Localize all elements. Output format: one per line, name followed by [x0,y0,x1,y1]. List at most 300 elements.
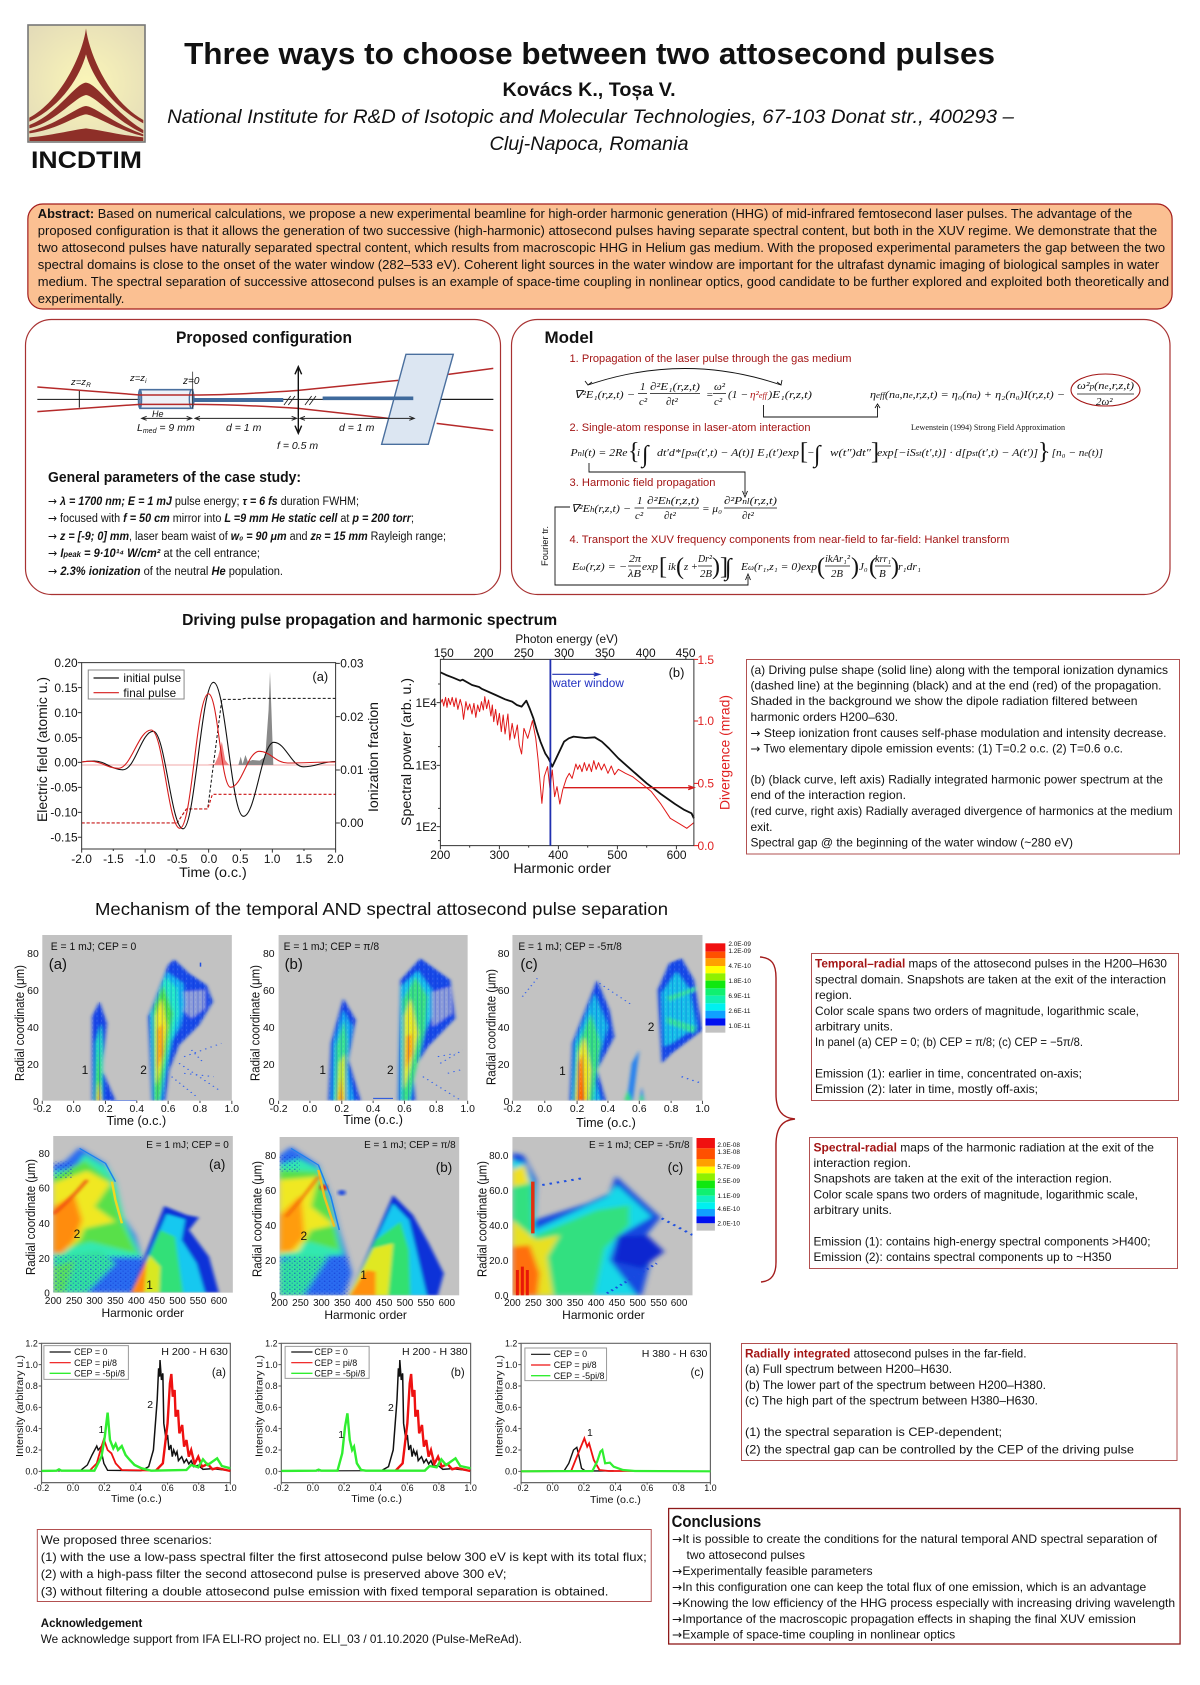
line chart c: high-energy part: 0.0 [546,1483,559,1493]
equation 3: harmonic propagation [571,495,777,522]
beamline diagram: z=0 [182,376,200,387]
heatmaps: temporal-radial maps: 1 [82,1063,89,1077]
heatmaps: spectral-radial maps: 0.0 [495,1291,509,1302]
equation 2: dipole moment: dt′d*[p st(t′,t) − A(t)] E₁(t′)exp [657,447,800,459]
heatmaps: spectral-radial maps: 600 [438,1298,456,1309]
equation 4: Hankel transform: 2B [700,568,712,580]
label: Fourier transform: Fourier tr. [540,526,551,566]
equation: effective refractive index: ηeff(na,ne,r,z,t) = η₀(n a) + η₂(n₀)I(r,z,t) − [870,389,1065,401]
heatmaps: spectral-radial maps: 400 [355,1298,372,1309]
chart b: harmonic spectrum and divergence: 450 [676,646,696,660]
text box: radially integrated pulses: (c) The high part of the spectrum between H380–H630. [745,1394,1038,1408]
equation: effective refractive index [870,374,1140,408]
panel: abstract: Abstract: Based on numerical calculations, we propose a new experimental beamline for high-order harmonic generation (HHG) of mid-infrared femtosecond laser pulses. The advantage of the [38,207,1132,221]
heatmaps: temporal-radial maps: 1.0 [695,1104,710,1115]
colour scale: spectral maps [696,1138,740,1231]
line chart c: high-energy part: 0.6 [641,1483,653,1493]
colour scale: temporal maps: 1.8E-10 [728,978,751,985]
chart a: driving pulse field and ionization: 0.02 [340,710,364,724]
equation 2: dipole moment: ] [871,439,879,465]
heatmaps: spectral-radial maps: 600 [671,1298,688,1309]
line chart c: high-energy part: 0.4 [609,1483,622,1493]
heatmaps: temporal-radial maps: 0.6 [397,1104,412,1115]
heatmaps: temporal-radial maps: 20 [263,1060,275,1071]
chart b: harmonic spectrum and divergence: 1.5 [697,653,714,667]
equation 1: laser propagation: = [706,389,713,401]
heatmaps: temporal-radial maps: 0 [504,1097,510,1108]
heatmaps: temporal-radial maps: E = 1 mJ; CEP = -5π/8 [518,941,622,953]
chart b: harmonic spectrum and divergence: 1E3 [416,758,437,773]
heatmaps: temporal-radial maps: 0.0 [303,1104,317,1115]
text box: spectral-radial maps: interaction region. [814,1157,911,1170]
heatmaps: temporal-radial maps: -0.2 [270,1104,288,1115]
heatmaps: temporal-radial maps: 0.4 [601,1104,615,1115]
line chart a: full spectrum: 0.0 [25,1466,38,1477]
heatmaps: spectral-radial maps: 400 [128,1296,145,1307]
heatmaps: temporal-radial maps: 0.4 [130,1104,144,1115]
line chart c: high-energy part: 0.4 [505,1424,517,1434]
heatmaps: spectral-radial maps: 300 [86,1296,103,1307]
line chart c: high-energy part: CEP = 0 [554,1349,587,1359]
colour scale: temporal maps: 2.0E-09 [728,941,751,948]
heatmaps: spectral-radial maps: (c) [668,1160,683,1175]
beamline diagram: L [137,422,143,434]
beamline diagram: d = 1 m [339,422,375,434]
line chart a: full spectrum: (a) [212,1367,226,1379]
heatmaps: spectral-radial maps: 350 [567,1298,584,1309]
equation 4: Hankel transform: ( [817,554,825,580]
text box: driving pulse description: exit. [750,821,772,834]
heatmaps: spectral-radial maps: 80.0 [489,1151,509,1162]
heatmaps: spectral-radial maps: 1 [146,1278,153,1292]
heatmaps: spectral-radial maps: 550 [650,1298,667,1309]
text box: three scenarios: (2) with a high-pass filter the second attosecond pulse is preserved above 300 eV; [41,1569,506,1581]
heatmaps: spectral-radial maps: 600 [211,1296,228,1307]
text box: driving pulse description: (dashed line) at the beginning (black) and at the end (red) of the propagation. [750,680,1162,692]
equation 1: laser propagation: c² [639,396,648,408]
panel: model [512,320,1170,594]
heatmaps: spectral-radial maps: 300 [546,1298,563,1309]
chart a: driving pulse field and ionization: Ionization fraction [365,702,381,812]
heatmaps: spectral-radial maps: 2 [300,1229,307,1243]
colour scale: temporal maps: 6.9E-11 [728,993,751,1000]
line chart b: low-energy part: CEP = pi/8 [314,1358,357,1368]
heading: proposed configuration: Proposed configuration [176,328,352,347]
line chart b: low-energy part: H 200 - H 380 [402,1347,468,1358]
heading: general parameters: General parameters of the case study: [48,470,301,486]
line chart b: low-energy part: 2 [388,1403,394,1414]
colour scale: temporal maps [705,941,751,1033]
equation 1: laser propagation: )E₁(r,z,t) [767,389,812,401]
line chart b: low-energy part: 0.0 [307,1483,319,1493]
list: case-study parameters [48,494,446,578]
line chart b: low-energy part: 0.6 [265,1402,278,1413]
equation 2: dipole moment: } [1038,439,1050,465]
heatmaps: temporal-radial maps: -0.2 [503,1104,522,1115]
text box: spectral-radial maps: Emission (2): contains spectral components up to ~H350 [814,1251,1112,1264]
chart a: driving pulse field and ionization: 1.0 [264,852,281,866]
equation 4: Hankel transform: [ [659,554,667,580]
chart b: harmonic spectrum and divergence [398,632,732,876]
heatmaps: temporal-radial maps: 1.0 [225,1104,239,1115]
equation 2: dipole moment: { [628,439,640,465]
text box: spectral-radial maps: Emission (1): contains high-energy spectral components >H400; [814,1236,1150,1248]
line chart c: high-energy part: 1 [587,1428,593,1439]
equation 3: harmonic propagation: ∇²Eh(r,z,t) − [571,503,631,515]
line chart c: high-energy part: 0.0 [505,1466,517,1477]
step headings: 3. Harmonic field propagation [570,477,716,489]
text box: radially integrated pulses: (b) The lower part of the spectrum between H200–H380. [745,1379,1046,1392]
heatmaps: temporal-radial maps: (c) [520,956,538,973]
chart a: driving pulse field and ionization: 0.00 [54,755,78,770]
chart a: driving pulse field and ionization: 0.20 [54,656,78,670]
heatmaps: spectral-radial maps: 300 [313,1298,330,1309]
heatmaps: spectral-radial maps: 40 [265,1221,277,1232]
acknowledgement: We acknowledge support from IFA ELI-RO project no. ELI_03 / 01.10.2020 (Pulse-MeReAd). [41,1634,522,1646]
equation 4: Hankel transform [571,553,921,582]
chart a: driving pulse field and ionization: 0.0 [201,852,218,866]
colour scale: temporal maps: 2.6E-11 [728,1008,751,1015]
equation 2: dipole moment: i [637,447,640,459]
text box: three scenarios: We proposed three scenarios: [41,1535,212,1547]
panel: abstract [28,204,1172,309]
equation 4: Hankel transform: r₁dr₁ [898,561,921,573]
heatmaps: temporal-radial maps: 0.6 [161,1104,176,1115]
heatmaps: temporal-radial maps: 60 [498,986,510,997]
equation 4: Hankel transform: ( [869,554,877,580]
equation 2: dipole moment: exp[−iS st(t′,t)] · d[p st(t′,t) − A(t′)] [877,447,1038,459]
beamline diagram [37,354,493,452]
line chart b: low-energy part: 0.8 [433,1483,445,1493]
line chart a: full spectrum: 2 [147,1400,153,1411]
equation 3: harmonic propagation: 1 [637,495,642,507]
equation 1: laser propagation: c² [714,396,723,408]
heatmaps: temporal-radial maps: -0.2 [33,1104,51,1115]
line chart b: low-energy part: 0.0 [265,1466,278,1477]
line chart a: full spectrum: 1.0 [25,1360,38,1370]
panel: abstract: proposed configuration is that it allows the generation of two successive (high-harmonic) attosecond pulses having separate spectral content, but both in the XUV regime. We demonstrate that the [38,224,1157,238]
heatmaps: temporal-radial maps: (b) [285,956,303,973]
heatmaps: spectral-radial maps: 60 [265,1186,277,1197]
citation: Lewenstein: Lewenstein (1994) Strong Field Approximation [911,422,1066,432]
equation 1: laser propagation: ∂t² [666,396,678,408]
heatmaps: spectral-radial maps: 500 [169,1296,186,1307]
panel: conclusions: →Experimentally feasible parameters [672,1564,873,1578]
heatmaps: spectral-radial maps: 200 [271,1298,288,1309]
line chart b: low-energy part: 0.8 [265,1381,278,1391]
chart b: harmonic spectrum and divergence: (b) [669,665,684,680]
heatmaps: spectral-radial maps: 80 [265,1151,277,1162]
chart a: driving pulse field and ionization: -0.05 [50,780,78,795]
heatmaps: temporal-radial maps: 40 [263,1023,275,1034]
line chart a: full spectrum: 0.4 [25,1424,38,1434]
chart b: harmonic spectrum and divergence: 200 [474,646,494,660]
chart b: harmonic spectrum and divergence: 200 [430,848,451,862]
line chart b: low-energy part: 0.4 [370,1483,382,1493]
line chart c: high-energy part: 0.8 [672,1483,685,1493]
equation: effective refractive index: ω²p(ne,r,z,t) [1077,380,1134,392]
authors: Kovács K., Toșa V. [502,80,676,101]
chart a: driving pulse field and ionization: -2.0 [71,852,92,866]
panel: conclusions: →Knowing the low efficiency of the HHG process especially with increasing driving wavelength [672,1596,1175,1610]
equation 3: harmonic propagation: ∂t² [742,510,754,522]
line chart b: low-energy part: 0.2 [338,1483,350,1493]
line chart b: low-energy part: CEP = -5pi/8 [314,1368,365,1379]
heatmaps: spectral-radial maps: 60 [39,1183,50,1195]
equation 4: Hankel transform: ikAr₁² [825,553,851,565]
text box: driving pulse description: end of the interaction region. [750,789,906,802]
equation 1: laser propagation: η²eff [750,389,769,401]
heatmaps: temporal-radial maps: 20 [27,1060,39,1071]
equation 4: Hankel transform: ∫ [723,555,733,582]
equation 3: harmonic propagation: = μ₀ [702,503,722,515]
colour scale: spectral maps: 2.0E-08 [717,1142,740,1149]
text box: temporal-radial maps: Emission (2): later in time, mostly off-axis; [815,1083,1038,1096]
line chart b: low-energy part: CEP = 0 [314,1347,348,1357]
equation 4: Hankel transform: Eω(r,z) = − [571,561,627,573]
step headings: 2. Single-atom response in laser-atom interaction [570,422,810,434]
line chart b: low-energy part: 1.2 [265,1338,278,1349]
panel: conclusions: →Importance of the macroscopic propagation effects in shaping the final XUV emission [672,1612,1136,1626]
arrow: dipole to harmonic source [589,463,748,497]
text box: radially integrated pulses: (1) the spectral separation is CEP-dependent; [745,1426,1002,1439]
line chart b: low-energy part [255,1338,477,1505]
map c [512,935,702,1101]
heatmaps: spectral-radial maps: 0 [44,1288,50,1300]
panel: abstract: two attosecond pulses have naturally separated spectral content, which results from macroscopic HHG in Helium gas medium. With the proposed experimental parameters the gap between the two [38,241,1165,255]
heatmaps: spectral-radial maps: Harmonic order [101,1308,184,1320]
chart a: driving pulse field and ionization: -0.10 [50,805,78,820]
line chart b: low-energy part: (b) [451,1367,465,1379]
panel: conclusions: →In this configuration one can keep the total flux of one emission, which is an advantage [672,1580,1146,1594]
heatmaps: temporal-radial maps: 20 [498,1060,510,1071]
line chart c: high-energy part: 0.2 [505,1445,517,1455]
equation 4: Hankel transform: ik [668,561,677,573]
beamline diagram: f = 0.5 m [277,440,318,452]
chart b: harmonic spectrum and divergence: 350 [595,646,615,660]
line chart c: high-energy part: 0.6 [505,1402,517,1413]
heatmaps: temporal-radial maps: 0.0 [537,1104,552,1115]
chart b: harmonic spectrum and divergence: Divergence (mrad) [716,695,732,810]
map b [279,935,468,1101]
equation 4: Hankel transform: ) [851,554,859,580]
heatmaps: temporal-radial maps: Time (o.c.) [576,1116,636,1130]
equation 4: Hankel transform: J₀ [859,561,868,573]
list: case-study parameters: → λ = 1700 nm; E = 1 mJ pulse energy; τ = 6 fs duration FWHM; [48,494,359,508]
beamline diagram: d = 1 m [226,422,262,434]
panel: conclusions: two attosecond pulses [687,1550,805,1562]
colour scale: spectral maps: 2.0E-10 [717,1220,740,1228]
heatmaps: spectral-radial maps: 250 [66,1296,83,1307]
equation 4: Hankel transform: )] [712,554,728,580]
chart a: driving pulse field and ionization: 0.5 [232,852,249,866]
chart b: harmonic spectrum and divergence: 250 [514,646,534,660]
affiliation: Cluj-Napoca, Romania [490,134,689,155]
line chart c: high-energy part: 1.0 [704,1483,717,1493]
chart b: harmonic spectrum and divergence: 300 [554,646,574,660]
heatmaps: temporal-radial maps: 1.0 [460,1104,475,1115]
text box: driving pulse description: → Steep ionization front causes self-phase modulation and intensity decrease. [750,726,1166,740]
panel: abstract: spectral domains is close to the onset of the water window (282–533 eV). Coherent light sources in the water window are important for the ultrafast dynamic imaging of biological samples in water [38,258,1159,272]
text box: spectral-radial maps: arbitrary units. [814,1204,892,1217]
line chart b: low-energy part: Intensity (arbitrary u.) [255,1355,266,1457]
heatmaps: spectral-radial maps: 400 [588,1298,605,1309]
chart a: driving pulse field and ionization: (a) [312,669,328,684]
panel: conclusions: →It is possible to create the conditions for the natural temporal AND spectral separation of [672,1532,1158,1546]
equation 3: harmonic propagation: ∂²E h(r,z,t) [647,495,699,507]
equation 1: laser propagation [574,381,812,408]
chart b: harmonic spectrum and divergence: Spectral power (arb. u.) [398,678,414,826]
chart b: harmonic spectrum and divergence: 500 [607,848,628,862]
heatmaps: spectral-radial maps: 40.0 [489,1221,509,1232]
line chart b: low-energy part: 1 [338,1430,344,1441]
heatmaps: temporal-radial maps: 1 [559,1064,566,1078]
equation 1: laser propagation: ∂²E₁(r,z,t) [650,381,700,393]
equation 4: Hankel transform: ( [676,554,684,580]
chart b: harmonic spectrum and divergence: 400 [548,848,568,862]
line chart c: high-energy part: 0.8 [505,1381,517,1391]
text box: radially integrated pulses: (a) Full spectrum between H200–H630. [745,1363,952,1376]
chart a: driving pulse field and ionization: 0.05 [54,731,78,745]
equation 2: dipole moment: · [n₀ − ne(t)] [1046,447,1103,459]
colour scale: temporal maps: 4.7E-10 [728,963,751,970]
line chart b: low-energy part: -0.2 [274,1483,289,1493]
line chart a: full spectrum: 0.0 [67,1483,79,1493]
heatmaps: temporal-radial maps: 80 [27,949,39,960]
equation 3: harmonic propagation: c² [635,510,644,522]
chart b: harmonic spectrum and divergence: 1E2 [416,820,437,834]
text box: spectral-radial maps: Spectral-radial maps of the harmonic radiation at the exit of the [814,1142,1154,1154]
chart b: harmonic spectrum and divergence: Photon energy (eV) [515,632,618,646]
text box: temporal-radial maps: arbitrary units. [815,1020,893,1034]
equation 2: dipole moment: [ [800,439,808,465]
chart b: harmonic spectrum and divergence: water window [551,676,624,690]
line chart a: full spectrum: 0.6 [25,1402,38,1413]
heatmaps: temporal-radial maps: 40 [498,1023,510,1034]
line chart a: full spectrum: -0.2 [34,1483,49,1493]
heatmaps: spectral-radial maps: Harmonic order [562,1310,645,1322]
line chart a: full spectrum: CEP = 0 [74,1347,108,1357]
heatmaps: temporal-radial maps: 2 [140,1063,147,1077]
heatmaps: spectral-radial maps: 350 [334,1298,351,1309]
list: case-study parameters: → focused with f = 50 cm mirror into L =9 mm He static cell at p = 200 torr; [48,511,414,525]
chart a: driving pulse field and ionization: 0.03 [340,656,364,671]
chart a: driving pulse field and ionization: 1.5 [296,852,313,866]
colour scale: temporal maps: 1.0E-11 [728,1023,751,1030]
logo caption: INCDTIM: INCDTIM [31,147,142,174]
line chart a: full spectrum: H 200 - H 630 [161,1347,228,1358]
line chart a: full spectrum: CEP = -5pi/8 [74,1368,125,1379]
acknowledgement [41,1618,522,1646]
heatmaps: spectral-radial maps [24,1136,693,1322]
heatmaps: temporal-radial maps: 1 [319,1063,326,1077]
legend: final pulse [123,688,176,700]
affiliation: National Institute for R&D of Isotopic and Molecular Technologies, 67-103 Donat str., 400293 – [167,107,1014,128]
heatmaps: spectral-radial maps: (b) [436,1160,452,1175]
heatmaps: spectral-radial maps: 500 [629,1298,647,1309]
heatmaps: temporal-radial maps: Time (o.c.) [343,1113,403,1127]
line chart c: high-energy part: -0.2 [513,1483,529,1493]
line chart c: high-energy part: Intensity (arbitrary u.) [494,1355,505,1457]
chart b: harmonic spectrum and divergence: 150 [434,646,454,660]
beamline diagram: z=z [130,373,145,384]
text box: driving pulse description: (a) Driving pulse shape (solid line) along with the temporal ionization dynamics [750,664,1168,677]
text box: radially integrated pulses: Radially integrated attosecond pulses in the far-field. [745,1348,1026,1360]
chart a: driving pulse field and ionization: 0.00 [340,816,364,830]
heatmaps: spectral-radial maps: 450 [609,1298,626,1309]
heatmaps: spectral-radial maps: E = 1 mJ; CEP = -5π/8 [589,1140,690,1151]
heatmaps: spectral-radial maps: Harmonic order [324,1310,407,1322]
heatmaps: temporal-radial maps: Radial coordinate (μm) [13,965,27,1081]
equation 2: dipole moment: ∫ [640,442,650,469]
heatmaps: spectral-radial maps: 250 [525,1298,542,1309]
heatmaps: temporal-radial maps: 0.2 [98,1104,113,1115]
heatmaps: spectral-radial maps: 450 [376,1298,393,1309]
heatmaps: spectral-radial maps: 1 [360,1268,367,1282]
heatmaps: spectral-radial maps: 250 [292,1298,309,1309]
equation 1: laser propagation: ω² [714,381,726,393]
chart b: harmonic spectrum and divergence: 400 [636,646,656,660]
text box: spectral-radial maps: Snapshots are taken at the exit of the interaction region. [814,1172,1112,1186]
text box: driving pulse description [746,660,1180,854]
chart a: driving pulse field and ionization: 0.10 [54,706,78,720]
chart a: driving pulse field and ionization: Time (o.c.) [179,864,247,880]
heatmaps: temporal-radial maps: 80 [498,949,510,960]
map a [53,1136,233,1293]
text box: temporal-radial maps: region. [815,989,852,1002]
text box: temporal-radial maps: Emission (1): earlier in time, concentrated on-axis; [815,1068,1082,1080]
line chart c: high-energy part [494,1338,717,1506]
heatmaps: spectral-radial maps: 550 [190,1296,207,1307]
heatmaps: spectral-radial maps: 200 [504,1298,521,1309]
equation: effective refractive index: 2ω² [1096,396,1113,408]
heatmaps: temporal-radial maps: 0 [269,1097,275,1108]
colour scale: spectral maps: 4.6E-10 [717,1206,740,1213]
heatmaps: spectral-radial maps: E = 1 mJ; CEP = π/8 [364,1140,456,1151]
text box: driving pulse description: (b) (black curve, left axis) Radially integrated harmonic power spectrum at the [750,774,1163,786]
text box: temporal-radial maps [812,954,1178,1100]
step headings: 4. Transport the XUV frequency components from near-field to far-field: Hankel transform [570,534,1010,546]
heatmaps: spectral-radial maps: (a) [209,1157,225,1172]
chart a: driving pulse field and ionization: Electric field (atomic u.) [34,677,50,822]
text box: temporal-radial maps: In panel (a) CEP = 0; (b) CEP = π/8; (c) CEP = −5π/8. [815,1036,1083,1049]
line chart a: full spectrum: 0.4 [130,1483,142,1493]
equation 2: dipole moment: Pnl(t) = 2Re [569,447,628,459]
line chart b: low-energy part: 0.6 [401,1483,414,1493]
line chart b: low-energy part: Time (o.c.) [351,1494,402,1505]
chart b: harmonic spectrum and divergence: 1E4 [416,696,437,710]
chart a: driving pulse field and ionization: 0.01 [340,763,364,777]
step headings [570,353,1010,546]
heatmaps: temporal-radial maps: 60 [27,986,39,997]
line chart a: full spectrum: Time (o.c.) [111,1494,162,1505]
equation 4: Hankel transform: Eω(r₁,z₁ = 0)exp [740,561,818,573]
line chart a: full spectrum [15,1338,237,1505]
equation 4: Hankel transform: ) [891,554,899,580]
title: Three ways to choose between two attosecond pulses [184,36,995,71]
equation 4: Hankel transform: exp [642,561,659,573]
panel: proposed configuration [26,320,500,594]
heading: model: Model [544,328,594,347]
step headings: 1. Propagation of the laser pulse through the gas medium [570,353,852,365]
equation 4: Hankel transform: Dr² [697,553,713,565]
heatmaps: spectral-radial maps: 80 [39,1149,50,1160]
heatmaps: temporal-radial maps: 0.4 [366,1104,381,1115]
text box: temporal-radial maps: spectral domain. Snapshots are taken at the exit of the interaction [815,974,1166,986]
chart a: driving pulse field and ionization: -1.0 [135,852,156,866]
text box: three scenarios: (3) without filtering a double attosecond pulse emission with fixed temporal separation is obtained. [41,1586,608,1599]
text box: driving pulse description: (red curve, right axis) Radially averaged divergence of harmonics at the medium [750,805,1172,818]
